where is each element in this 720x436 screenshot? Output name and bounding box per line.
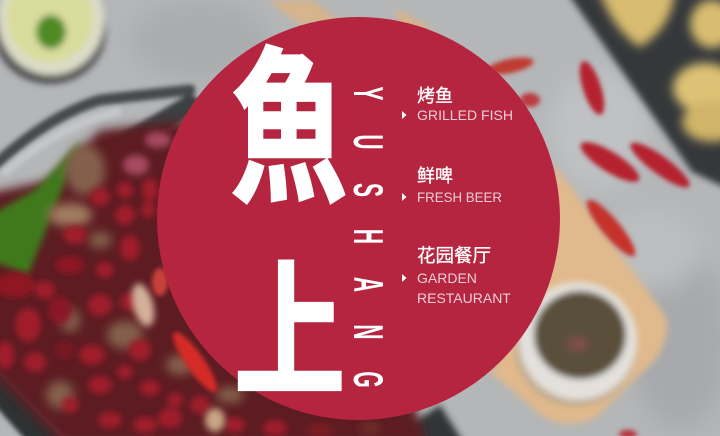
small sauce bowl top left [0,0,106,84]
arrow marker [402,274,406,282]
dark tray rim at bottom [380,405,465,436]
red circle panel [157,17,560,420]
item: grilled fish: 烤鱼 [417,86,453,106]
potatoes [597,0,720,142]
item: garden restaurant: 花园餐厅 [417,245,491,266]
item: fresh beer: FRESH BEER [417,189,502,205]
item: garden restaurant: RESTAURANT [417,290,511,306]
logo character: fish: 魚 [231,0,347,237]
item: garden restaurant: GARDEN [417,270,477,286]
tray handle [0,90,190,172]
light flesh pieces [128,281,225,432]
item: fresh beer: 鲜啤 [417,166,453,186]
item: garden restaurant [402,245,511,306]
tray lower edge [0,362,70,436]
arrow marker [402,111,406,119]
item: grilled fish: GRILLED FISH [417,107,513,123]
dark tray top right [562,0,720,192]
brown flesh layer [46,145,244,409]
item: fresh beer [402,166,502,205]
chilli pieces in dish [0,132,382,436]
wooden board pieces [268,0,667,424]
red chilli strip [152,268,223,397]
green vegetables [0,140,82,275]
vertical brand name: YUSHANG [344,86,391,388]
sauce bowl [515,282,637,406]
logo character: up: 上 [234,214,345,427]
arrow marker [402,193,406,201]
fish dish base [0,120,425,436]
item: grilled fish [402,86,513,123]
chillies [485,54,694,436]
